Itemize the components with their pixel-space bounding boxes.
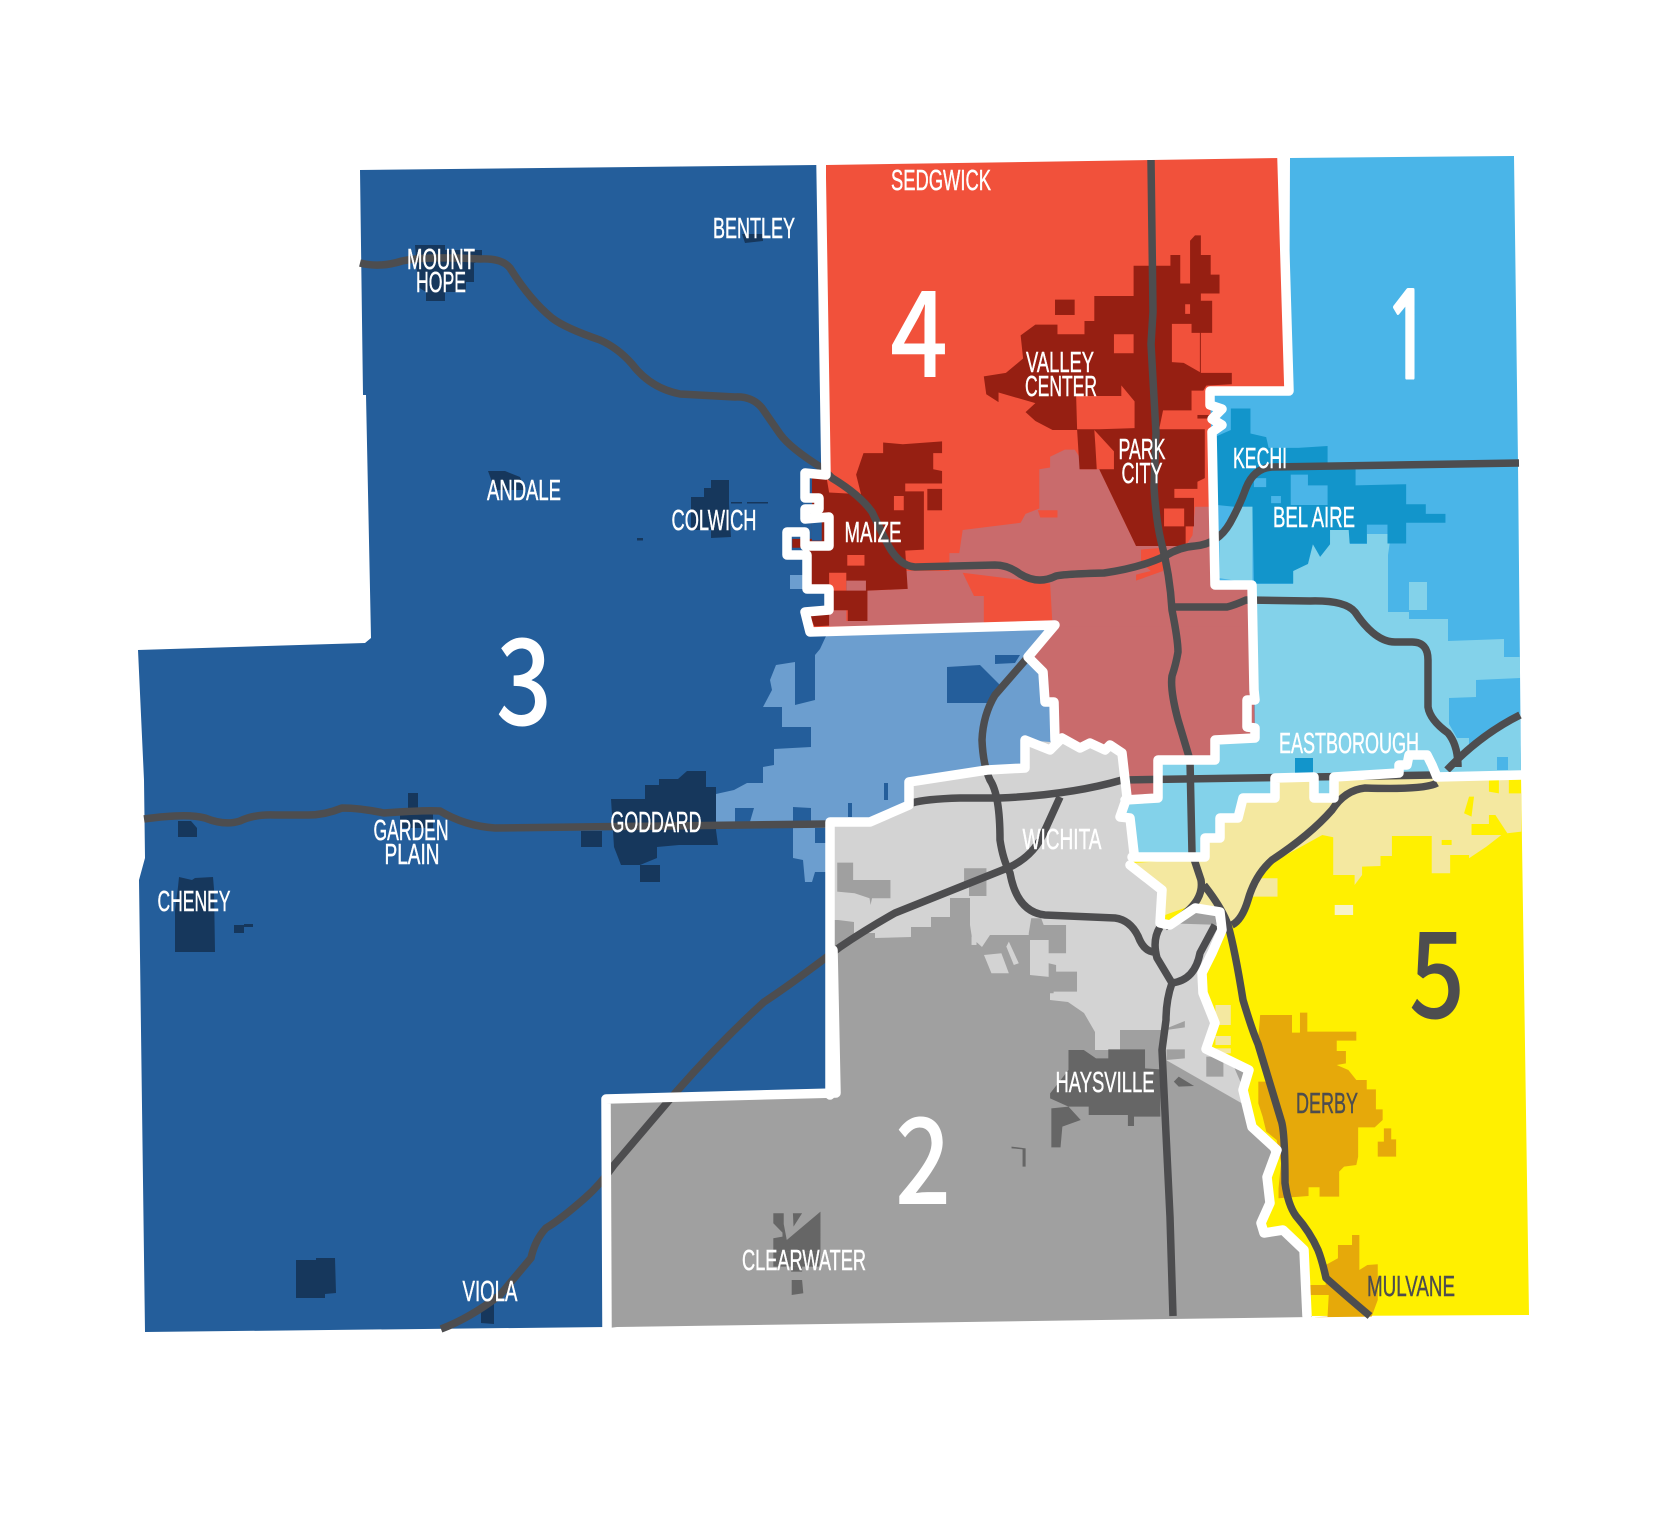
towns in district 5	[1215, 1005, 1396, 1317]
city labels: VALLEY	[1026, 347, 1094, 379]
city labels: HOPE	[416, 267, 466, 299]
white district boundaries	[606, 158, 1521, 1328]
district numbers: 5	[1409, 879, 1465, 1053]
panel: district 5 (yellow southeast)	[1128, 755, 1529, 1317]
city labels: VIOLA	[462, 1276, 518, 1308]
city labels: CHENEY	[158, 886, 230, 918]
towns in district 2	[773, 1049, 1194, 1295]
city labels: KECHI	[1233, 443, 1287, 475]
city labels: EASTBOROUGH	[1279, 728, 1419, 760]
city labels: MOUNT	[407, 244, 475, 276]
city labels: PLAIN	[384, 839, 440, 871]
panel: district 4 (red north)	[792, 158, 1289, 800]
city labels: CENTER	[1025, 371, 1097, 403]
district numbers: 1	[1382, 278, 1434, 397]
district numbers: 2	[895, 1065, 951, 1239]
district numbers: 3	[496, 586, 552, 760]
city labels: PARK	[1118, 434, 1166, 466]
city labels: WICHITA	[1022, 824, 1102, 856]
city labels: MAIZE	[844, 517, 902, 549]
district numbers: 4	[890, 238, 948, 412]
city labels: BEL AIRE	[1273, 502, 1355, 534]
city labels: DERBY	[1296, 1088, 1358, 1120]
city labels: BENTLEY	[713, 213, 795, 245]
panel: district 1 (light blue northeast)	[1120, 156, 1521, 857]
city labels: CLEARWATER	[742, 1245, 866, 1277]
city labels: GARDEN	[374, 815, 448, 847]
panel: district 2 (gray south)	[607, 738, 1312, 1328]
city labels: GODDARD	[610, 807, 702, 839]
city labels: COLWICH	[672, 505, 756, 537]
panel: district 3 (dark blue west)	[138, 165, 1056, 1332]
district numbers	[496, 238, 1465, 1239]
city labels: SEDGWICK	[891, 165, 991, 197]
towns in district 1	[1215, 409, 1445, 584]
city labels	[158, 165, 1455, 1308]
city labels: CITY	[1122, 458, 1162, 490]
city labels: HAYSVILLE	[1056, 1067, 1154, 1099]
highways	[144, 160, 1520, 1329]
towns in district 4	[792, 235, 1232, 626]
towns in district 3	[175, 234, 768, 1324]
city labels: MULVANE	[1367, 1271, 1455, 1303]
city labels: ANDALE	[487, 475, 561, 507]
